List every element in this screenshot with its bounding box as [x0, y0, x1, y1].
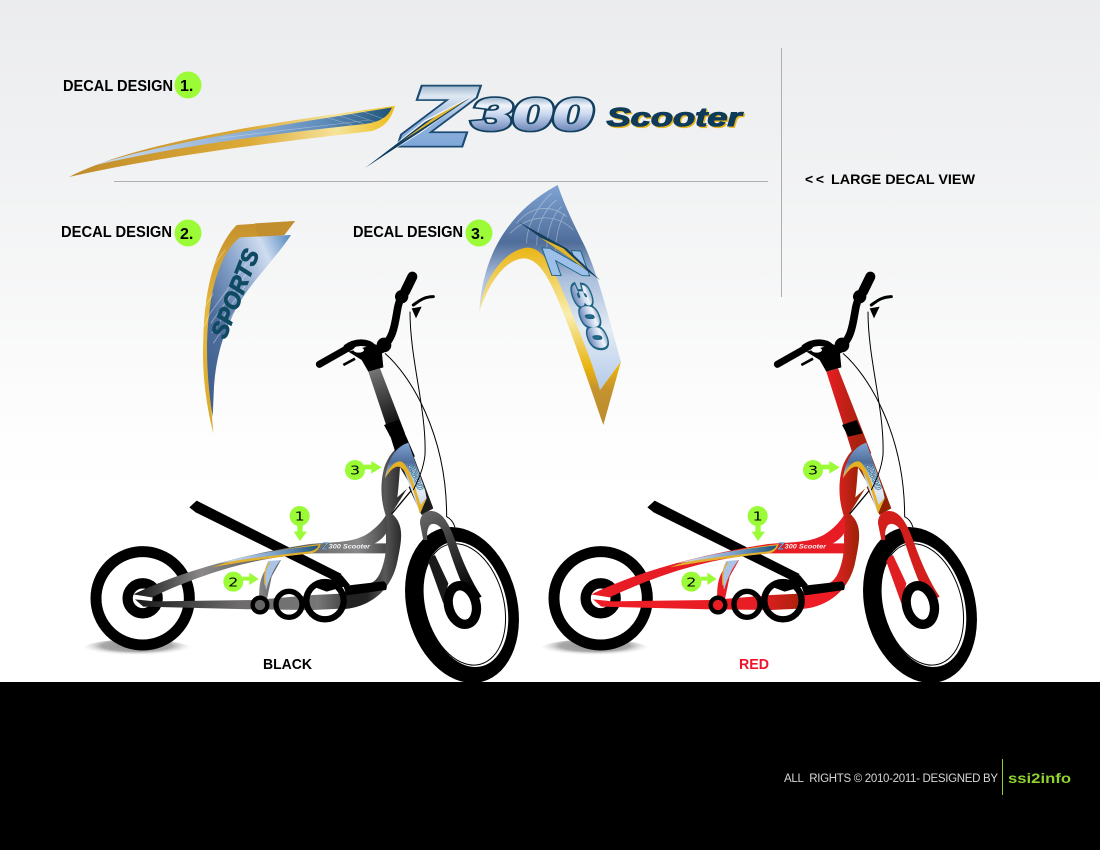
- frame logo text: Z: [777, 542, 785, 553]
- z300 scooter logo: Scooter: [606, 102, 744, 132]
- upright: [717, 560, 739, 601]
- step bar: [189, 501, 342, 582]
- decal 3 z300: Z: [533, 243, 597, 281]
- frame logo text: [777, 542, 827, 553]
- cables: [385, 312, 455, 527]
- z300 scooter logo: Z: [399, 71, 479, 161]
- callout 3: [345, 460, 382, 480]
- small rollers: [711, 582, 802, 619]
- stem clamp: [384, 420, 415, 457]
- stem clamp: [842, 420, 863, 437]
- front fork arch and right leg: [420, 511, 482, 602]
- callout 1: [748, 506, 768, 541]
- large decal view note: <<: [805, 171, 824, 187]
- decal 3 on head: [843, 443, 885, 514]
- heading: decal design 2: 2.: [180, 226, 193, 243]
- footer separator: [1002, 759, 1004, 795]
- stem: [368, 368, 405, 437]
- decal 3 z300: [479, 185, 621, 425]
- decal 1 swoosh: [69, 106, 395, 177]
- decal 3 on head: [385, 443, 427, 514]
- decal 2 sports: SPORTS: [206, 245, 264, 342]
- step bar: [647, 501, 800, 582]
- callout 3: 3: [808, 464, 818, 478]
- decal 3 z300: 300: [566, 280, 613, 353]
- stem: [826, 368, 871, 455]
- small rollers: [253, 582, 344, 619]
- front fork arch and right leg: [878, 511, 940, 602]
- decal 1 on frame: [212, 544, 321, 567]
- lower black bar: [343, 581, 387, 595]
- callout 2: [223, 572, 259, 592]
- front wheel: [846, 514, 994, 696]
- frame logo text: 300 Scooter: [329, 545, 371, 551]
- heading: decal design 1: [63, 72, 202, 98]
- rear wheel: [96, 552, 189, 645]
- callout 2: 2: [228, 576, 238, 590]
- scooter: red: [541, 277, 994, 696]
- handlebar: [777, 277, 891, 372]
- decal 3 z300: 300: [566, 280, 613, 353]
- decal 3 on head: Z300: [406, 462, 426, 492]
- front fork left leg: [881, 538, 906, 603]
- front hub: [444, 582, 481, 628]
- decal 2 sports: [203, 221, 295, 433]
- callout 1: 1: [295, 510, 305, 524]
- footer credit: ALL RIGHTS © 2010-2011- DESIGNED BY: [784, 773, 998, 785]
- decal 1 on frame: [670, 544, 779, 567]
- rear lower stay: [135, 593, 347, 610]
- decal 3 z300: Z: [533, 243, 597, 281]
- rear lower stay: [593, 593, 805, 610]
- horizontal divider: [114, 180, 768, 182]
- main column: [340, 442, 433, 609]
- front hub: [902, 582, 939, 628]
- heading: decal design 3: 3.: [471, 226, 484, 243]
- ground shadow: [83, 639, 190, 657]
- frame logo text: [321, 542, 371, 553]
- top tube: [133, 515, 392, 597]
- front fork left leg: [423, 538, 448, 603]
- heading: decal design 1: DECAL DESIGN: [63, 78, 173, 95]
- ground shadow: [541, 639, 648, 657]
- scooter: black: [83, 277, 536, 696]
- heading: decal design 2: [61, 220, 202, 246]
- top tube: [591, 515, 850, 597]
- designer logo: ssi2info: [1008, 770, 1071, 786]
- cables: [843, 312, 913, 527]
- callout 2: 2: [686, 576, 696, 590]
- z300 scooter logo: Scooter: [608, 104, 746, 134]
- heading: decal design 1: 1.: [180, 78, 193, 95]
- decal 2 on upright: [723, 560, 739, 590]
- lower black bar: [801, 581, 845, 595]
- callout 1: 1: [753, 510, 763, 524]
- z300 scooter logo: 300: [470, 90, 594, 139]
- frame logo text: 300 Scooter: [785, 545, 827, 551]
- callout 2: [681, 572, 717, 592]
- front wheel: [388, 514, 536, 696]
- main column: [798, 442, 891, 609]
- z300 scooter logo: 300: [470, 90, 594, 139]
- large decal view note: LARGE DECAL VIEW: [831, 171, 976, 187]
- z300 scooter logo: Z: [399, 71, 479, 161]
- footer band: [0, 682, 1100, 850]
- label: red: RED: [739, 656, 769, 673]
- heading: decal design 3: DECAL DESIGN: [353, 224, 463, 241]
- heading: decal design 3: [353, 220, 492, 246]
- upright: [259, 560, 281, 601]
- callout 1: [290, 506, 310, 541]
- rear wheel: [554, 552, 647, 645]
- heading: decal design 2: DECAL DESIGN: [61, 224, 172, 241]
- label: black: BLACK: [263, 656, 312, 673]
- callout 3: [803, 460, 840, 480]
- frame logo text: Z: [321, 542, 329, 553]
- handlebar: [319, 277, 433, 372]
- decal 2 on upright: [265, 560, 281, 590]
- decal 3 on head: Z300: [864, 462, 884, 492]
- callout 3: 3: [350, 464, 360, 478]
- vertical divider: [780, 48, 782, 297]
- fork leg over wheel interior: [886, 555, 906, 603]
- z300 scooter logo: [365, 71, 746, 168]
- fork leg over wheel interior: [428, 555, 448, 603]
